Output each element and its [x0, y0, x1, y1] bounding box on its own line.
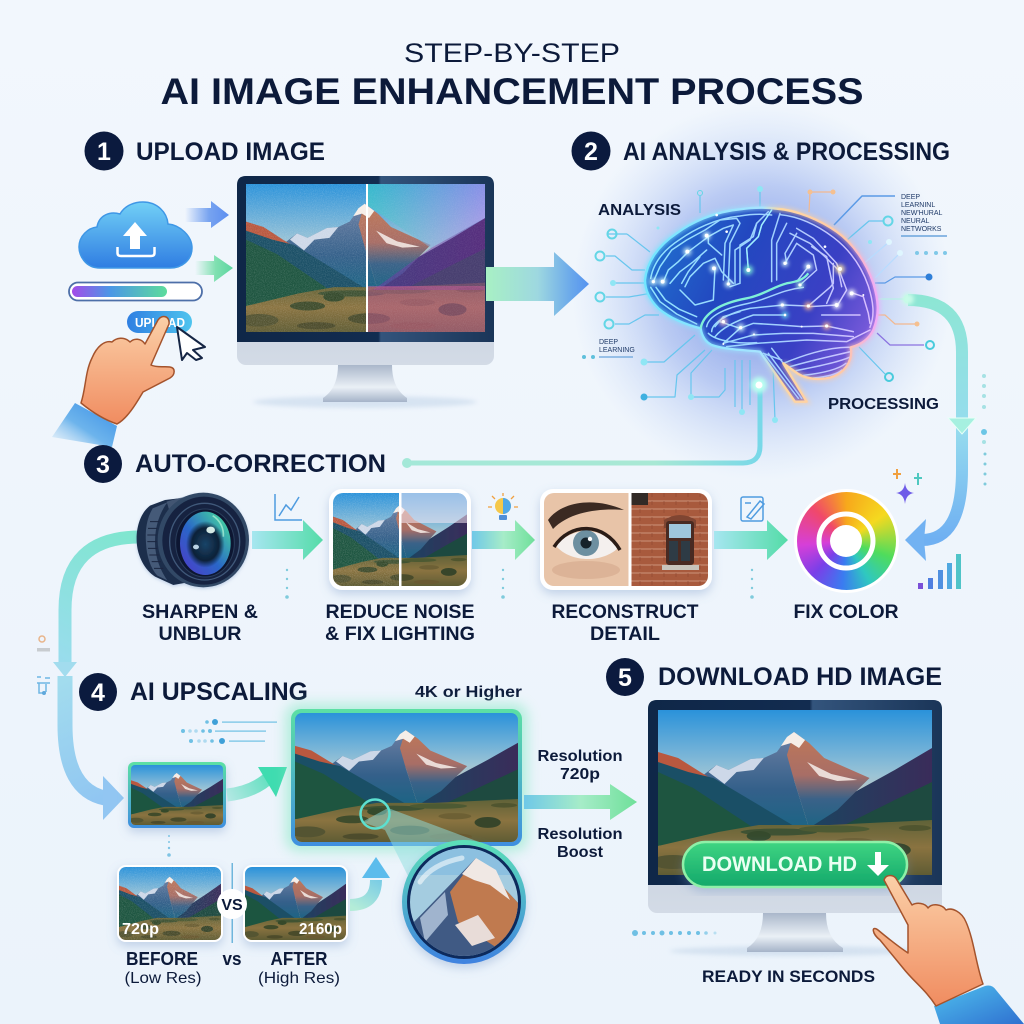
progress bar	[69, 282, 202, 300]
step 3 heading: 3	[96, 451, 110, 479]
arrow: progress to monitor	[195, 255, 233, 282]
icon: camera lens	[137, 493, 249, 587]
label: fix color: FIX COLOR	[794, 602, 899, 623]
connector: brain to step 3	[402, 377, 767, 468]
label: resolution boost: Boost	[557, 844, 604, 861]
color wheel center ring	[819, 514, 873, 568]
photo: reduce noise and fix lighting	[329, 489, 471, 590]
icon: sleeve left	[52, 403, 117, 447]
label: analysis: ANALYSIS	[598, 202, 681, 219]
step 3 heading	[84, 445, 386, 483]
label: deep learning left	[599, 339, 635, 354]
arrow: comparison to large image	[350, 857, 390, 905]
label: sharpen and unblur	[142, 602, 258, 645]
icon: color wheel	[794, 489, 899, 593]
step 2 heading: 2	[584, 138, 598, 166]
circuit nodes	[582, 186, 987, 444]
arrow: brain to color wheel	[902, 293, 976, 561]
comparison: before	[116, 865, 223, 942]
dotted connector thumbnail to comparison	[167, 835, 171, 857]
arrow: monitor to brain	[486, 252, 589, 316]
icon: hand pressing download	[873, 876, 983, 1006]
icon: cursor	[177, 327, 205, 360]
small side icons	[37, 636, 50, 695]
step 4 heading: 4	[91, 679, 105, 707]
icon: signal bars	[918, 554, 961, 589]
arrow: lens to step 4	[53, 537, 140, 677]
label: deep learning neural networks right	[901, 194, 943, 233]
title: STEP-BY-STEP	[404, 38, 620, 68]
progress dot lines	[181, 719, 277, 744]
label: after	[258, 949, 340, 987]
label: reconstruct detail: RECONSTRUCT	[552, 602, 699, 623]
comparison: after: 2160p	[299, 921, 342, 938]
arrow: noise photo to detail	[472, 520, 535, 560]
label: before	[124, 949, 202, 987]
label: sharpen and unblur: UNBLUR	[158, 624, 242, 645]
label: deep learning neural networks right: NETWORKS	[901, 226, 942, 233]
label: reduce noise and fix lighting: & FIX LIGHTING	[325, 624, 475, 645]
label: deep learning left: LEARNING	[599, 347, 635, 354]
label: processing: PROCESSING	[828, 396, 939, 413]
label: deep learning neural networks right: NEURAL	[901, 218, 930, 225]
step 5 heading: 5	[618, 664, 632, 692]
icon: sleeve right	[934, 986, 1024, 1024]
step 5 heading	[606, 658, 942, 696]
label: deep learning left: DEEP	[599, 339, 618, 346]
icon: hand pressing upload	[81, 317, 174, 424]
icon: chart trend	[275, 494, 302, 520]
comparison: before: 720p	[122, 921, 159, 938]
thumbnail: low res	[128, 762, 226, 828]
label: resolution boost	[538, 826, 622, 861]
upload button	[127, 311, 192, 333]
magnifier small ring	[360, 800, 390, 828]
magnifier beam	[362, 808, 490, 880]
label: vs: vs	[222, 949, 242, 969]
label: 4K or higher: 4K or Higher	[415, 684, 522, 701]
icon: edit pencil	[741, 497, 764, 521]
icon: upload cloud	[79, 202, 192, 268]
icon: light bulb	[488, 493, 518, 520]
label: resolution 720p: Resolution	[538, 748, 622, 765]
arrow: into low-res thumbnail	[65, 676, 124, 820]
step 2 heading: AI ANALYSIS & PROCESSING	[623, 138, 950, 166]
step 4 heading: AI UPSCALING	[130, 678, 308, 706]
magnifier lens	[400, 840, 530, 964]
monitor: upload preview	[237, 176, 494, 408]
label: deep learning neural networks right: LEARNINL	[901, 202, 935, 209]
icon: sparkles	[893, 469, 922, 504]
vs badge	[217, 863, 247, 943]
arrow: large image to monitor	[524, 784, 637, 820]
title: AI IMAGE ENHANCEMENT PROCESS	[160, 71, 864, 112]
label: after: (High Res)	[258, 970, 340, 987]
label: after: AFTER	[270, 949, 328, 969]
step 1 heading: UPLOAD IMAGE	[136, 138, 325, 166]
vs badge: VS	[221, 897, 243, 914]
circuit lines around brain	[599, 189, 947, 420]
label: before: BEFORE	[126, 949, 198, 969]
step 4 heading	[79, 673, 308, 711]
arrow: thumbnail to large image	[227, 767, 287, 797]
arrow: lens to noise photo	[252, 520, 323, 560]
label: resolution 720p	[538, 748, 622, 783]
label: before: (Low Res)	[124, 970, 202, 987]
brain illustration	[645, 208, 878, 402]
label: reconstruct detail: DETAIL	[590, 624, 660, 645]
label: reduce noise and fix lighting: REDUCE NOISE	[326, 602, 474, 623]
step 5 heading: DOWNLOAD HD IMAGE	[658, 663, 942, 691]
label: resolution 720p: 720p	[560, 766, 600, 783]
step 1 heading	[84, 132, 325, 170]
dotted dividers	[285, 452, 986, 599]
button: download HD: DOWNLOAD HD	[702, 853, 857, 876]
arrow: detail to color wheel	[714, 520, 788, 560]
step 2 heading	[572, 132, 950, 170]
label: sharpen and unblur: SHARPEN &	[142, 602, 258, 623]
photo: reconstruct detail	[540, 489, 712, 590]
large upscaled image	[285, 703, 528, 852]
label: resolution boost: Resolution	[538, 826, 622, 843]
monitor: download	[648, 700, 942, 956]
comparison: after	[242, 865, 348, 942]
upload button: UPLOAD	[135, 315, 185, 330]
label: reduce noise and fix lighting	[325, 602, 475, 645]
step 3 heading: AUTO-CORRECTION	[135, 450, 386, 478]
arrow: cloud to monitor	[185, 201, 229, 228]
label: deep learning neural networks right: NEW'HURAL	[901, 210, 943, 217]
brain glow	[572, 100, 952, 480]
dots row	[632, 930, 716, 936]
label: reconstruct detail	[552, 602, 699, 645]
label: ready in seconds: READY IN SECONDS	[702, 967, 875, 986]
step 1 heading: 1	[97, 138, 111, 166]
label: deep learning neural networks right: DEEP	[901, 194, 920, 201]
button: download HD	[683, 842, 907, 887]
title	[160, 38, 864, 112]
